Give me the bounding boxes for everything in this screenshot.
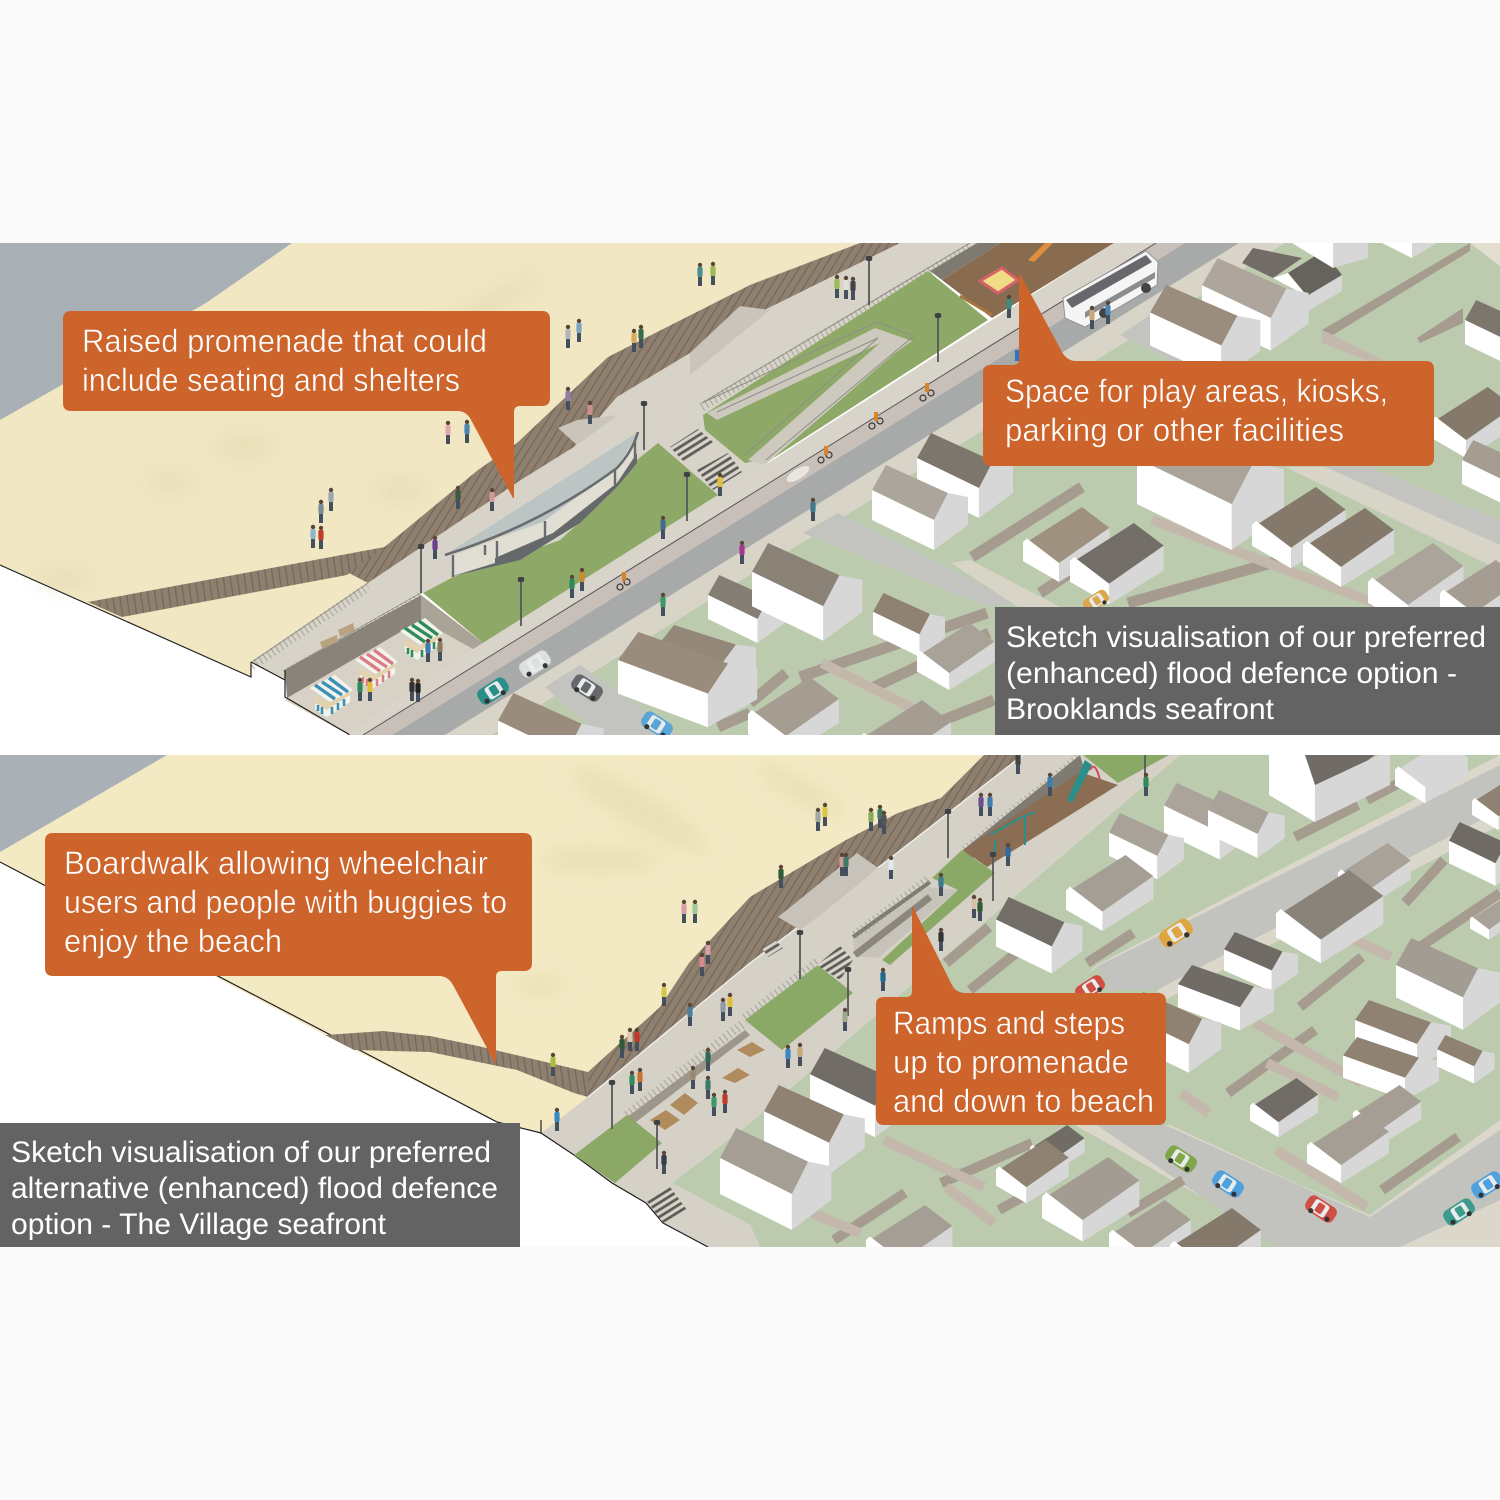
cycle symbol	[786, 466, 810, 482]
callout: ramps and steps: up to promenade	[893, 1044, 1129, 1080]
promenade fence rails	[627, 757, 1080, 1115]
lower market plaza	[285, 630, 482, 734]
callout: boardwalk	[45, 833, 532, 1063]
side streets and parking	[545, 243, 1500, 735]
green bank 2	[745, 965, 853, 1050]
callout: raised promenade: include seating and shelters	[82, 362, 460, 398]
ramp rails	[702, 322, 914, 460]
callout: ramps and steps: Ramps and steps	[893, 1005, 1125, 1041]
planters	[650, 1042, 765, 1130]
callout: play areas and facilities: Space for play areas, kiosks,	[1005, 373, 1388, 409]
promenade rails	[252, 243, 970, 674]
zig-zag ramps	[707, 328, 912, 465]
caption: Brooklands seafront: (enhanced) flood defence option -	[1006, 657, 1457, 690]
market stalls	[310, 618, 443, 717]
coach	[1063, 251, 1158, 327]
caption: The Village seafront: alternative (enhanced) flood defence	[11, 1172, 498, 1205]
sand cut edge line	[0, 862, 541, 1133]
green bank 3	[882, 850, 995, 965]
caption: Brooklands seafront	[995, 607, 1500, 735]
callout: play areas and facilities	[983, 274, 1434, 466]
steps	[646, 940, 853, 1223]
boardwalk	[588, 755, 1025, 1097]
houses	[498, 243, 1500, 786]
sand beach	[0, 755, 1030, 1133]
cars	[1073, 916, 1500, 1228]
curved timber pier	[325, 1031, 588, 1097]
lower ramp zone	[853, 887, 958, 958]
tall white house	[1269, 750, 1390, 822]
slide and swings	[990, 760, 1100, 855]
callout: raised promenade: Raised promenade that could	[82, 323, 487, 359]
street lamps	[609, 747, 1148, 1169]
garden fences	[812, 780, 1500, 1240]
caption: Brooklands seafront: Brooklands seafront	[1006, 693, 1275, 726]
play area	[963, 772, 1118, 867]
lower residential road	[1094, 1123, 1500, 1247]
panel: The Village seafront sketch	[0, 740, 1500, 1287]
sand cut edge line	[0, 565, 251, 677]
sandpit	[980, 268, 1018, 293]
side ramp and landing on promenade	[558, 306, 770, 445]
people	[550, 751, 1149, 1174]
panel: Brooklands seafront sketch	[0, 243, 1500, 786]
cycle path	[363, 243, 1185, 735]
street lamps	[418, 256, 941, 626]
ramp inner wall	[855, 897, 930, 955]
sand beach	[0, 243, 905, 677]
timber pier	[88, 547, 385, 617]
pavement strip	[349, 243, 1156, 735]
promenade and ground paving	[541, 755, 1180, 1247]
callout: boardwalk: users and people with buggies to	[64, 884, 507, 920]
callout: raised promenade	[63, 311, 550, 498]
boardwalk rail	[588, 755, 1023, 1097]
houses	[720, 740, 1500, 1287]
retaining wall	[285, 595, 421, 698]
ramp wall	[853, 882, 930, 937]
promenade paving	[252, 243, 977, 680]
caption: The Village seafront	[0, 1123, 520, 1247]
boardwalk	[349, 243, 905, 583]
callout: play areas and facilities: parking or other facilities	[1005, 412, 1344, 448]
callout: ramps and steps: and down to beach	[893, 1083, 1154, 1119]
white band between panels	[0, 735, 1500, 755]
people and cyclists	[310, 262, 1111, 702]
shelter	[445, 432, 638, 577]
upper green with ramps	[703, 271, 988, 463]
upper residential road	[1097, 765, 1500, 990]
garden land	[672, 755, 1500, 1247]
retaining wall near play area	[930, 243, 1000, 280]
sea	[0, 243, 292, 420]
green bank 4	[1083, 755, 1169, 783]
caption: The Village seafront: option - The Village seafront	[11, 1208, 387, 1241]
land and gardens	[445, 243, 1500, 735]
callout: boardwalk: Boardwalk allowing wheelchair	[64, 845, 488, 881]
play area	[942, 243, 1114, 318]
lower residential road pavement	[1075, 1120, 1500, 1247]
back white houses	[1292, 243, 1437, 268]
lower pavement	[445, 243, 1285, 735]
callout: boardwalk: enjoy the beach	[64, 923, 282, 959]
sand mottling	[38, 288, 516, 594]
paving behind steps	[660, 445, 775, 497]
benches	[320, 623, 355, 648]
blue car partly hidden	[1015, 350, 1020, 361]
steps to promenade	[670, 429, 742, 490]
main road	[392, 243, 1239, 735]
green bank 1	[574, 1115, 662, 1183]
caption: Brooklands seafront: Sketch visualisation of our preferred	[1006, 621, 1486, 654]
cars	[475, 588, 1111, 741]
house: dark cross-gable	[1242, 248, 1342, 311]
upper ramp zone	[778, 853, 878, 930]
garden fences	[718, 243, 1470, 727]
lower edge line	[541, 1120, 708, 1247]
sea	[0, 755, 167, 852]
sand mottling	[514, 754, 849, 995]
play equipment	[1028, 243, 1053, 262]
caption: The Village seafront: Sketch visualisation of our preferred	[11, 1136, 491, 1169]
planter edge wall	[627, 1030, 750, 1125]
callout: ramps and steps	[876, 907, 1166, 1125]
green embankment	[423, 443, 718, 643]
bench edge	[960, 296, 992, 315]
